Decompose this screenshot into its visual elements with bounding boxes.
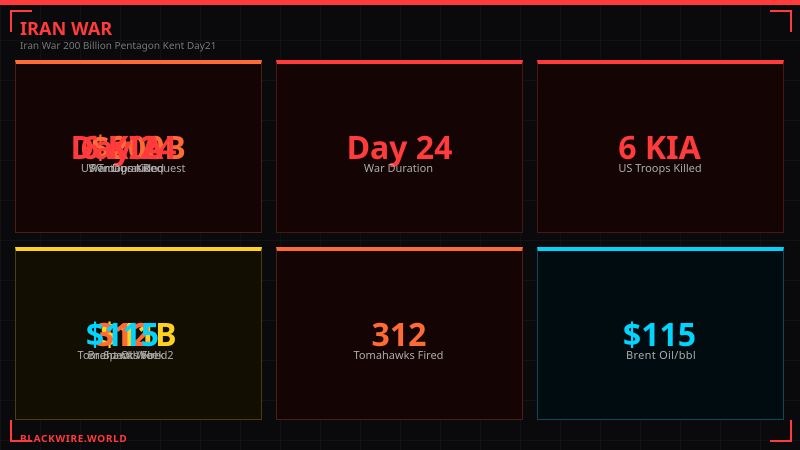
stat label: US Troops Killed (overlapping): US Troops Killed [81,161,164,176]
subtitle: Iran War 200 Billion Pentagon Kent Day21 [20,38,216,52]
stat label: Tomahawks Fired: Tomahawks Fired [354,348,443,363]
stat label: US Troops Killed: US Troops Killed [618,161,702,176]
stat value: 6 KIA (overlapping): 6 KIA [81,126,163,169]
stat value: 312: 312 [372,313,426,356]
stat value: $115 (overlapping): $115 [86,313,159,356]
corner bracket top left [10,10,32,32]
stat label: Brent Oil/bbl: Brent Oil/bbl [626,348,696,363]
stat value: Day 24: Day 24 [347,126,452,169]
stat value: $200B: $200B [91,126,186,169]
corner bracket top right [770,10,792,32]
panel: war duration [276,60,523,233]
stat value: $115: $115 [623,313,696,356]
top accent bar [0,0,800,5]
stat label: Tomahawks Fired (overlapping): Tomahawks Fired [78,348,167,363]
stat value: 6 KIA: 6 KIA [618,126,701,169]
stat value: Day 24 (overlapping): Day 24 [71,126,176,169]
stat label: War Duration (overlapping): War Duration [88,161,158,176]
panel: bottom left, overlapping stats [15,247,262,420]
stat label: Brent Oil/bbl (overlapping): Brent Oil/bbl [88,348,157,363]
stat label: War Duration: War Duration [364,161,433,176]
stat value: 312 (overlapping): 312 [96,313,150,356]
stat label: Spent Week 2: Spent Week 2 [103,348,174,363]
panel: troops killed [537,60,784,233]
panel: tomahawks [276,247,523,420]
footer brand: BLACKWIRE.WORLD [20,431,127,445]
title: IRAN WAR [20,17,112,41]
stat value: $11B: $11B [100,313,177,356]
panel: brent oil [537,247,784,420]
corner bracket bottom left [10,420,32,442]
corner bracket bottom right [770,420,792,442]
stat label: Pentagon Request: Pentagon Request [91,161,185,176]
panel: top left, overlapping stats [15,60,262,233]
